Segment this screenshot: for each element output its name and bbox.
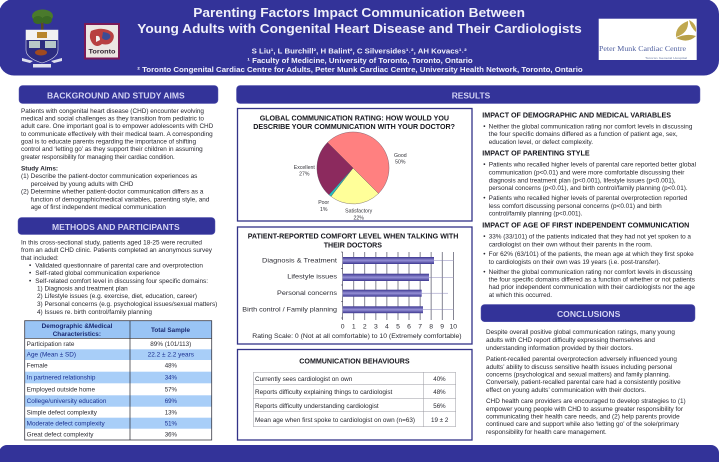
results: age of first independent communication: • (483, 269, 486, 276)
text block: study aims: function of demographic/medical variables, parenting style, and (31, 196, 210, 204)
text block: study aims: Describe the patient-doctor communication experiences as (31, 173, 197, 180)
text block: conclusions: communicating their health care needs, and (2) help parents provide (486, 414, 680, 420)
text block: methods: Self-rated global communication experience (35, 270, 160, 277)
category labels (242, 258, 338, 314)
results: parenting style: control/family planning (p<0.001). (489, 210, 583, 217)
text block: methods: 3) Personal concerns (e.g. psychological issues/sexual matters) (37, 301, 217, 308)
results: parenting style: • (483, 162, 486, 168)
table rows: Employed outside home (27, 386, 96, 393)
icon: university crest (22, 10, 62, 68)
chart title (248, 232, 458, 249)
section heading: conclusions: CONCLUSIONS (557, 309, 621, 319)
icon: Toronto logo: Toronto (88, 50, 116, 56)
axis numbers: 2 (363, 324, 367, 330)
results: age of first independent communication: to cardiologists on their own was 19 years (i.e. post-transfer). (489, 259, 661, 266)
category labels: Personal concerns (277, 290, 338, 297)
table rows: 34% (165, 374, 177, 381)
results: parenting style: communication (p<0.01) and were more comfortable discussing their (489, 170, 685, 176)
pie labels: Satisfactory (345, 208, 373, 214)
section heading: results (236, 86, 700, 104)
table rows: Female (27, 362, 48, 369)
text block: methods: Self-related comfort level in discussing four specific domains: (35, 278, 208, 285)
results: parenting style: IMPACT OF PARENTING STYLE (482, 149, 590, 158)
text block: conclusions: Despite overall positive global communication ratings, many young (486, 329, 675, 336)
text block: conclusions: concerns (psychological and sexual matters) and family planning. (486, 372, 671, 378)
results: parenting style: Patients who recalled higher levels of parental care reported better global (489, 162, 696, 168)
table rows: Participation rate (27, 341, 75, 348)
panel: comfort level bar chart (238, 227, 472, 344)
text block: conclusions: Patient-recalled parental overprotection adversely influenced young (486, 356, 677, 363)
pie labels: 50% (395, 160, 406, 166)
table rows: 57% (165, 386, 177, 393)
pie labels: Poor (318, 200, 329, 206)
axis numbers: 9 (440, 324, 444, 330)
text block: conclusions: effect on young adults’ communication with their doctors. (486, 387, 646, 394)
rating scale note: Rating Scale: 0 (Not at all comfortable) to 10 (Extremely comfortable) (252, 333, 462, 340)
results: age of first independent communication: • (483, 234, 486, 240)
table rows: 51% (165, 420, 177, 427)
results: age of first independent communication: For 62% (63/101) of the patients, the mean age at which they first spoke (489, 251, 694, 258)
chart title (253, 113, 455, 131)
footer band (0, 445, 719, 462)
text block: background: adult care. One important goal is to empower adolescents with CHD (21, 123, 214, 130)
table rows: 22.2 ± 2.2 years (148, 352, 194, 359)
results: age of first independent communication: cardiologist on their own without their parents in the room. (489, 242, 653, 248)
table title: COMMUNICATION BEHAVIOURS (299, 356, 410, 365)
section heading: results: RESULTS (452, 91, 490, 101)
text block: conclusions: continued care and support while also ‘letting go’ of the sole/primary (486, 421, 680, 428)
results: demographic and medical variables: • (483, 124, 486, 130)
table rows: 56% (433, 403, 446, 410)
text block: methods: 4) Issues re. birth control/family planning (37, 309, 152, 316)
text block: conclusions: understanding information provided by their doctors. (486, 345, 633, 352)
text block: methods: • (29, 278, 31, 285)
section heading: methods and participants (18, 218, 215, 234)
text block: methods: Validated questionnaire of parental care and overprotection (35, 262, 203, 270)
table rows: Moderate defect complexity (27, 420, 106, 427)
text block: conclusions: adults’ ability to discuss sensitive health issues including personal (486, 364, 672, 371)
authors and affiliations: S Liu¹, L Burchill², H Balint², C Silversides¹˒², AH Kovacs¹˒² (252, 48, 467, 56)
poster title (137, 6, 582, 36)
text block: study aims: (1) (21, 173, 29, 180)
text block: background: medical and social challenges as they transition from pediatric to (21, 116, 204, 122)
icon: Toronto logo (84, 23, 120, 60)
text block: methods: In this cross-sectional study, patients aged 18-25 were recruited (21, 240, 202, 246)
category labels: Lifestyle issues (287, 274, 338, 281)
text block: methods: 1) Diagnosis and treatment plan (37, 286, 128, 292)
results: demographic and medical variables: the four specific domains differed as a function of patient age, sex, (489, 131, 678, 138)
panel: global communication rating pie chart (238, 108, 472, 221)
table header (42, 323, 190, 338)
results: parenting style: Patients who recalled higher levels of parental overprotection reported (489, 195, 688, 202)
authors and affiliations: ² Toronto Congenital Cardiac Centre for Adults, Peter Munk Cardiac Centre, University Health Network, Toronto, Ontario (137, 67, 583, 74)
text block: conclusions (486, 329, 686, 436)
table rows: In partnered relationship (27, 374, 96, 381)
results: demographic and medical variables: education level, or defect complexity. (489, 139, 593, 146)
table rows: Age (Mean ± SD) (27, 352, 76, 359)
table rows: Currently sees cardiologist on own (255, 376, 353, 383)
axis numbers: 7 (418, 324, 422, 330)
chart title: DESCRIBE YOUR COMMUNICATION WITH YOUR DOCTOR? (253, 122, 455, 131)
axis numbers (341, 324, 457, 330)
table rows: 69% (165, 398, 177, 405)
text block: conclusions: CHD health care providers are encouraged to develop strategies to (1) (486, 398, 686, 405)
table rows: 40% (433, 376, 446, 383)
panel: communication behaviours (238, 350, 472, 440)
table rows: 19 ± 2 (431, 417, 449, 424)
text block: conclusions: Conversely, patient-recalled parental care had a consistently positive (486, 379, 681, 386)
poster title: Parenting Factors Impact Communication Between (193, 6, 525, 20)
section heading: conclusions (481, 304, 695, 322)
results: parenting style: • (483, 195, 486, 202)
table rows: Mean age when first spoke to cardiologist on own (n=63) (255, 417, 415, 424)
axis numbers: 3 (374, 324, 378, 330)
header banner (0, 0, 719, 76)
results: parenting style: less comfort discussing personal concerns (p<0.01) and birth (489, 203, 662, 210)
text block: methods: • (29, 270, 31, 277)
section heading: methods and participants: METHODS AND PARTICIPANTS (52, 222, 180, 232)
demographic table (25, 321, 212, 440)
icon: Peter Munk Cardiac Centre logo: Toronto General Hospital (645, 56, 687, 60)
pie chart (317, 132, 389, 204)
axis numbers: 6 (407, 324, 411, 330)
pie labels: Excellent (294, 165, 315, 171)
table rows: 13% (165, 409, 177, 416)
text block: methods: • (29, 262, 31, 270)
category labels: Birth control / Family planning (242, 307, 337, 314)
results: age of first independent communication: the four specific domains differed as a function of whether or not patients (489, 276, 695, 284)
text block: background: greater responsibility for managing their cardiac condition. (21, 154, 175, 161)
table rows: 48% (433, 389, 446, 396)
axis numbers: 5 (396, 324, 400, 330)
axis numbers: 1 (352, 324, 356, 330)
results: demographic and medical variables: IMPACT OF DEMOGRAPHIC AND MEDICAL VARIABLES (482, 110, 671, 119)
text block: background: Patients with congenital heart disease (CHD) encounter evolving (21, 108, 204, 115)
table rows: Reports difficulty understanding cardiologist (255, 403, 379, 410)
authors and affiliations (137, 48, 583, 74)
table rows: College/university education (27, 398, 107, 405)
pie labels: 1% (320, 207, 328, 213)
section heading: background and study aims: BACKGROUND AND STUDY AIMS (47, 91, 185, 101)
table rows: Great defect complexity (27, 431, 94, 438)
text block: background: to communicate effectively with their medical team. A corresponding (21, 131, 213, 138)
results: age of first independent communication: Neither the global communication rating nor comfort levels in discussing (489, 269, 693, 276)
table rows: 89% (101/113) (150, 341, 191, 348)
pie labels: 27% (299, 172, 310, 178)
text block: study aims (21, 166, 210, 211)
results: age of first independent communication: had prior independent communication with their cardiologists nor the age (489, 284, 695, 291)
text block: background (21, 108, 214, 161)
table header: Total Sample (151, 327, 190, 334)
category labels: Diagnosis & Treatment (262, 258, 337, 265)
axis numbers: 8 (429, 324, 433, 330)
results: age of first independent communication: • (483, 251, 486, 258)
results: age of first independent communication: IMPACT OF AGE OF FIRST INDEPENDENT COMMUNICATION (482, 220, 689, 229)
results: demographic and medical variables: Neither the global communication rating nor comfort levels in discussing (489, 124, 693, 130)
text block: conclusions: responsibility for health care management. (486, 429, 607, 436)
text block: background: control and ‘letting go’ as they support their children in assuming (21, 146, 203, 153)
text block: methods (21, 240, 217, 316)
table header: Demographic &Medical (42, 323, 113, 330)
results: age of first independent communication (482, 220, 695, 299)
pie labels: 22% (354, 215, 364, 221)
icon: Peter Munk Cardiac Centre logo: Peter Munk Cardiac Centre (599, 45, 686, 53)
icon: Peter Munk Cardiac Centre logo (599, 19, 697, 60)
text block: methods: 2) Lifestyle issues (e.g. exercise, diet, education, career) (37, 293, 197, 300)
table rows (255, 376, 449, 424)
table rows (27, 341, 194, 438)
pie labels (294, 153, 407, 221)
poster title: Young Adults with Congenital Heart Disease and Their Cardiologists (137, 22, 582, 36)
results: parenting style: diagnosis and treatment plan (p<0.001), lifestyle issues (p<0.001), (489, 178, 676, 184)
text block: study aims: Study Aims: (21, 166, 58, 172)
table rows: Reports difficulty explaining things to cardiologist (255, 389, 393, 396)
table header: Characteristics: (53, 331, 101, 338)
text block: methods: from an adult CHD clinic. Patients completed an anonymous survey (21, 247, 213, 254)
text block: methods: that included: (21, 255, 59, 262)
text block: study aims: perceived by young adults with CHD (31, 181, 134, 188)
text block: conclusions: empower young people with CHD to assume greater responsibility for (486, 406, 684, 413)
axis numbers: 4 (385, 324, 389, 330)
results: age of first independent communication: at which this occurred. (489, 292, 552, 299)
pie labels: Good (394, 153, 407, 159)
text block: study aims: Determine whether patient-doctor communication differs as a (31, 188, 204, 196)
table rows: 48% (165, 362, 177, 369)
text block: background: goal is to educate parents regarding the importance of shifting (21, 138, 196, 146)
text block: study aims: age of first independent medical communication (31, 204, 166, 211)
table rows: Simple defect complexity (27, 409, 98, 416)
chart title: GLOBAL COMMUNICATION RATING: HOW WOULD YOU (260, 113, 449, 122)
text block: study aims: (2) (21, 188, 29, 196)
results: parenting style (482, 149, 696, 217)
axis numbers: 10 (450, 324, 457, 330)
axis numbers: 0 (341, 324, 345, 330)
bars (343, 257, 434, 313)
chart title: PATIENT-REPORTED COMFORT LEVEL WHEN TALKING WITH (248, 232, 458, 241)
authors and affiliations: ¹ Faculty of Medicine, University of Toronto, Toronto, Ontario (247, 58, 473, 65)
results: age of first independent communication: 33% (33/101) of the patients indicated that they had not yet spoken to a (489, 234, 691, 240)
section heading: background and study aims (19, 86, 218, 104)
table rows: 36% (165, 431, 177, 438)
text block: conclusions: adults with CHD report difficulty expressing themselves and (486, 337, 655, 344)
results: demographic and medical variables (482, 110, 693, 146)
chart title: THEIR DOCTORS (324, 240, 382, 249)
results: parenting style: personal concerns (p<0.01), and birth control/family planning (p<0.01). (489, 185, 688, 192)
